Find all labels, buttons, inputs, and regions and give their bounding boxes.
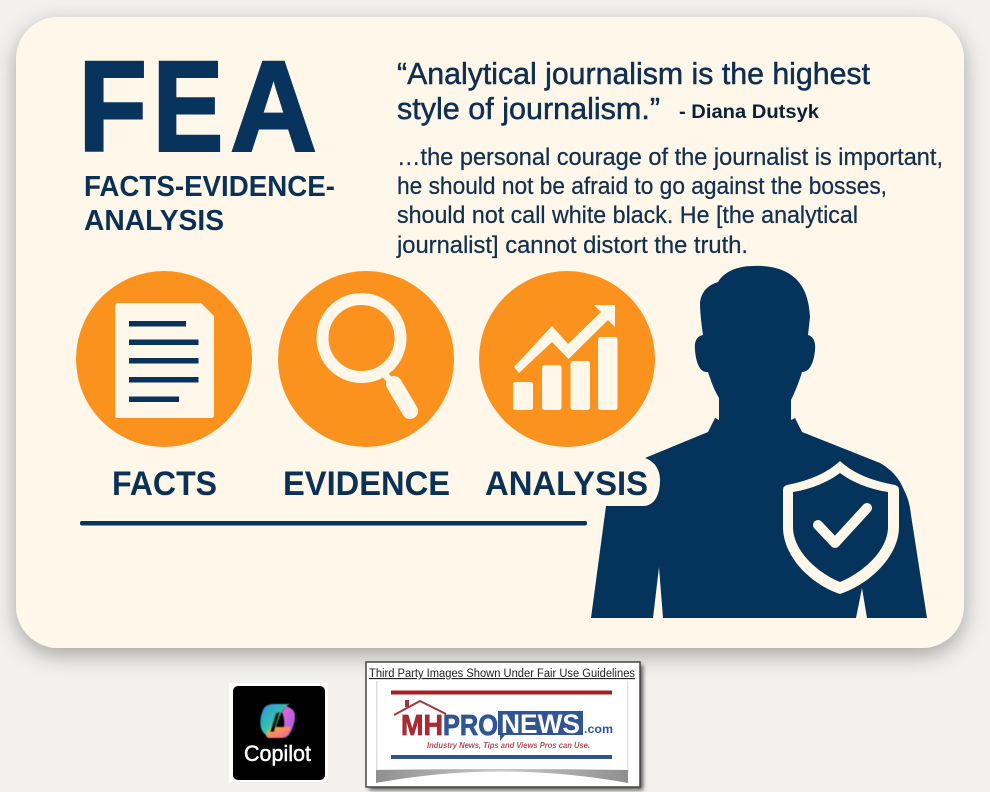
subtitle: facts-evidence-analysis: FACTS-EVIDENCE- bbox=[84, 171, 335, 203]
panel: cream card bbox=[16, 17, 964, 648]
title: FEA bbox=[79, 36, 316, 178]
label: facts: FACTS bbox=[112, 465, 217, 503]
icon: Copilot mark bbox=[260, 704, 295, 738]
label: analysis: ANALYSIS bbox=[485, 465, 648, 503]
wordmark: NEWS box bbox=[498, 711, 583, 741]
logo: Copilot badge bbox=[229, 683, 328, 782]
quote body text: he should not be afraid to go against the bosses, bbox=[397, 173, 887, 200]
logo: MHProNews framed badge bbox=[366, 662, 643, 790]
quote body text: …the personal courage of the journalist is important, bbox=[397, 144, 943, 171]
caption: fair use: Third Party Images Shown Under Fair Use Guidelines bbox=[369, 668, 635, 680]
logo: Copilot badge: Copilot bbox=[244, 741, 311, 766]
title: FEA: F bbox=[79, 36, 147, 178]
title: FEA: A bbox=[230, 36, 316, 178]
wordmark: MH: MH bbox=[401, 710, 443, 742]
label: evidence: EVIDENCE bbox=[283, 465, 450, 503]
reflection shadow bbox=[376, 769, 628, 783]
icon: evidence magnifier bbox=[278, 271, 454, 447]
quote heading bbox=[397, 56, 870, 126]
wordmark: PRO: PRO bbox=[443, 710, 498, 742]
subtitle: facts-evidence-analysis: ANALYSIS bbox=[84, 205, 224, 237]
tagline: Industry News, Tips and Views Pros can Use. bbox=[427, 740, 590, 750]
quote body text: should not call white black. He [the analytical bbox=[397, 202, 858, 229]
wordmark: .com: .com bbox=[584, 722, 613, 736]
icon: analysis chart bbox=[479, 271, 655, 447]
title: FEA: E bbox=[153, 36, 223, 178]
red rule bbox=[391, 690, 612, 694]
quote body text: journalist] cannot distort the truth. bbox=[396, 232, 748, 259]
wordmark: NEWS: NEWS bbox=[501, 709, 580, 739]
subtitle: facts-evidence-analysis bbox=[84, 171, 335, 237]
icon: facts document bbox=[76, 271, 252, 447]
blue rule bbox=[391, 755, 612, 759]
quote heading: style of journalism.” bbox=[397, 91, 660, 126]
quote heading: “Analytical journalism is the highest bbox=[397, 56, 870, 91]
divider line bbox=[80, 521, 587, 526]
icon: person silhouette with shield bbox=[591, 266, 927, 618]
quote body text bbox=[396, 144, 943, 259]
icon: shield with check bbox=[783, 461, 899, 594]
icon: house roof bbox=[394, 701, 446, 715]
quote attribution: - Diana Dutsyk bbox=[679, 102, 819, 123]
